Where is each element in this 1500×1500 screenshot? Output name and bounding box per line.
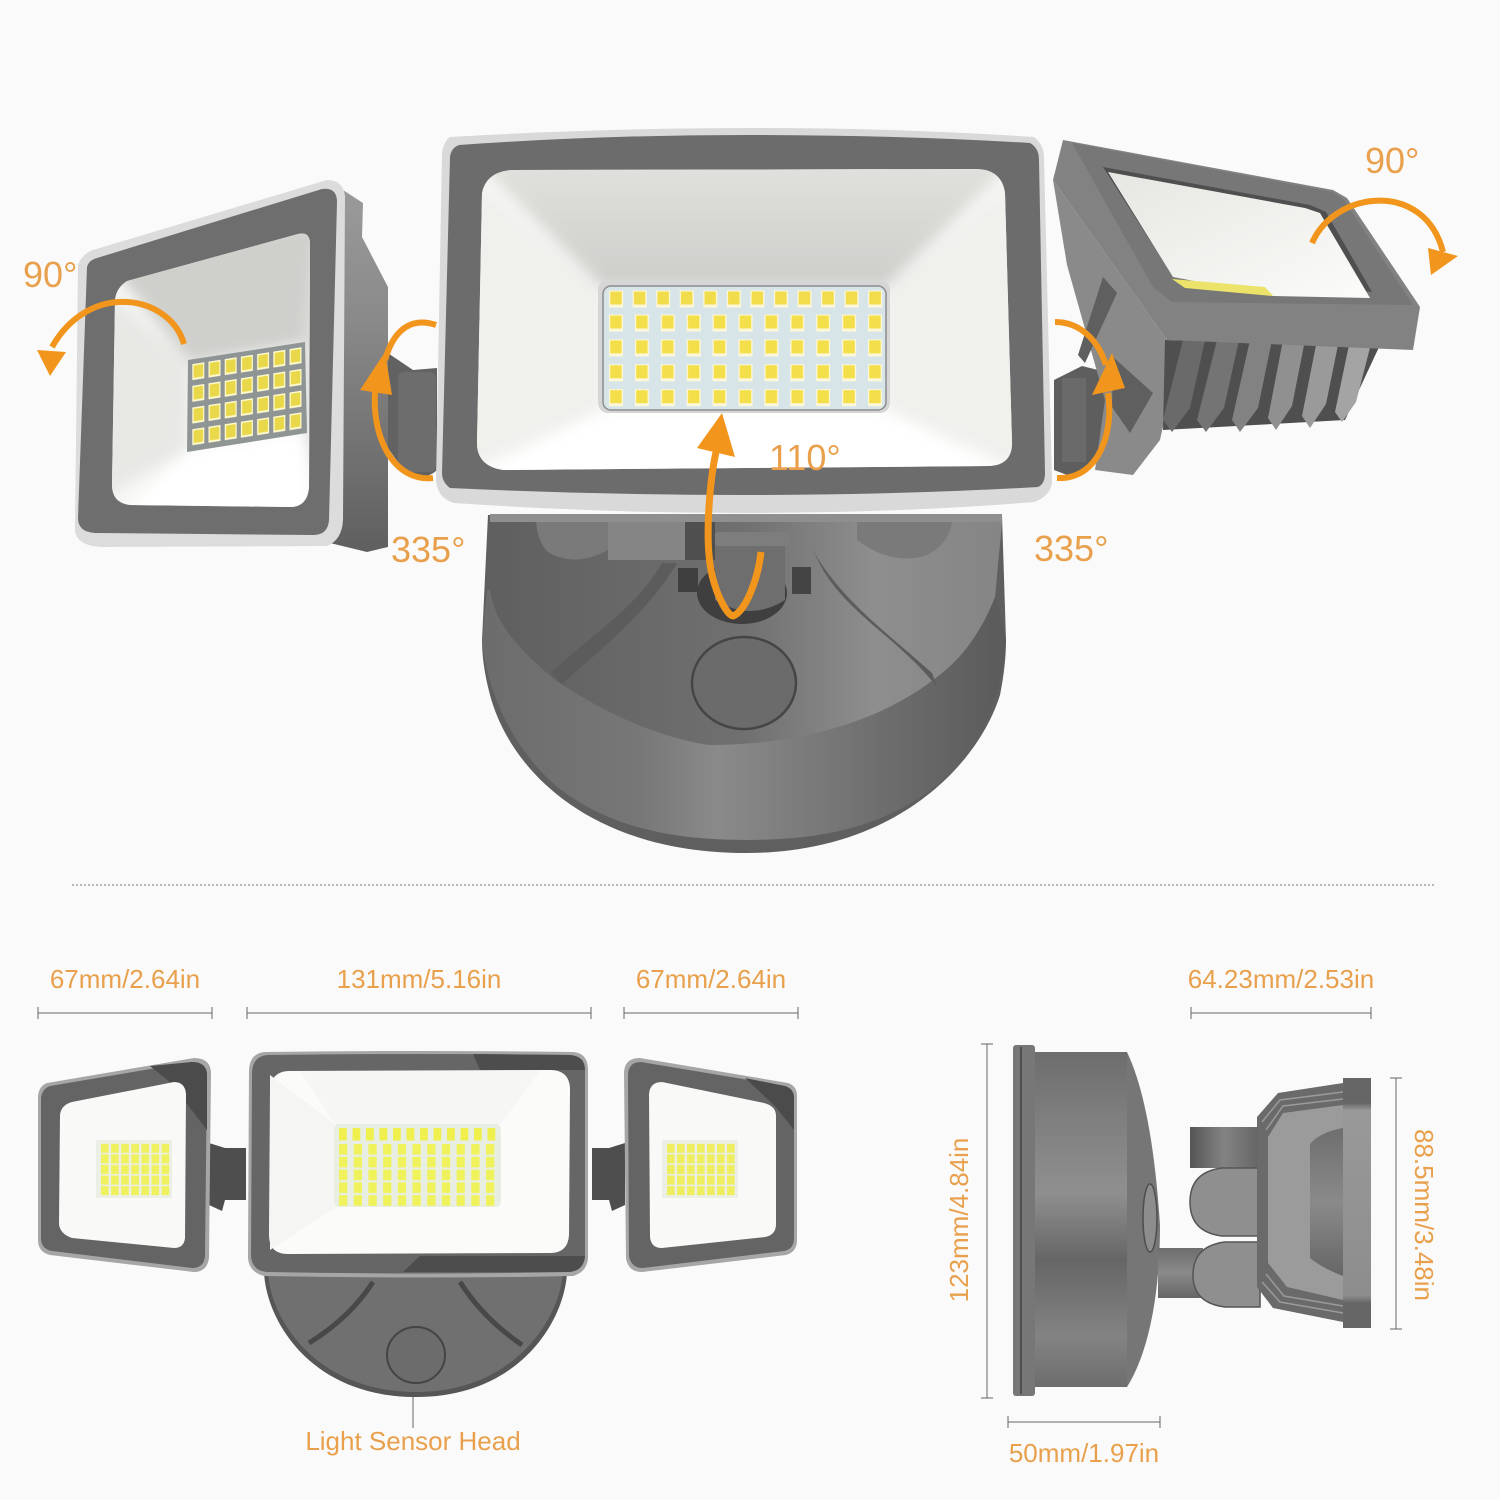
rotation labels: 335° [1034,528,1108,569]
side view dimensions: 88.5mm/3.48in [1409,1129,1439,1301]
front view: left head [38,1058,211,1272]
right light head [1053,140,1420,475]
side view: arm [1158,1127,1260,1307]
left head: lens facets [112,234,310,507]
arrow: right head 90 degrees [1312,201,1458,275]
side view dimensions: 64.23mm/2.53in [1188,964,1374,994]
rotation arrows [37,201,1458,616]
light sensor callout: Light Sensor Head [305,1426,521,1456]
rotation labels: 110° [769,437,841,478]
side view: base [1013,1045,1160,1396]
rotation labels: 90° [23,254,77,295]
arrow: right joint 335 degrees [1055,322,1125,478]
right head: heat sink fins [1163,340,1380,432]
side view light [1013,1045,1371,1396]
side view dimensions [944,964,1439,1468]
divider [72,884,1434,886]
base: swivel post [490,514,1002,624]
rotation labels [23,140,1419,570]
product view: wall base [482,514,1006,853]
front view: center head [248,1051,588,1278]
center head: lens facets [477,169,1012,470]
right head: body [1053,180,1180,475]
front view light [38,1051,797,1397]
front view: right head [624,1058,797,1272]
side view: head housing [1257,1078,1371,1328]
left swivel joint [373,343,437,477]
front view dimension labels: 67mm/2.64in [50,964,200,994]
front view dimension labels: 131mm/5.16in [337,964,501,994]
arrow: left joint 335 degrees [360,323,436,478]
arrow: left head 90 degrees [37,302,184,376]
base: ribs [551,547,937,687]
base: light sensor [692,637,796,729]
front view dimension labels: 67mm/2.64in [636,964,786,994]
right head: LED edge [1172,279,1273,296]
center light head [436,128,1052,513]
side view dimensions: 123mm/4.84in [944,1138,974,1302]
LED array center [598,280,890,413]
LED array left [187,342,307,452]
arrow: center 110 degrees [697,413,761,616]
front view dimension labels [38,964,798,1013]
rotation labels: 335° [391,529,465,570]
right swivel joint [1054,366,1108,478]
right head: frame [1053,140,1420,350]
base: lens domes [536,517,953,560]
rotation labels: 90° [1365,140,1419,181]
left light head [75,180,388,552]
front view: base [264,1272,567,1397]
side view dimensions: 50mm/1.97in [1009,1438,1159,1468]
front view: joints [209,1143,625,1211]
